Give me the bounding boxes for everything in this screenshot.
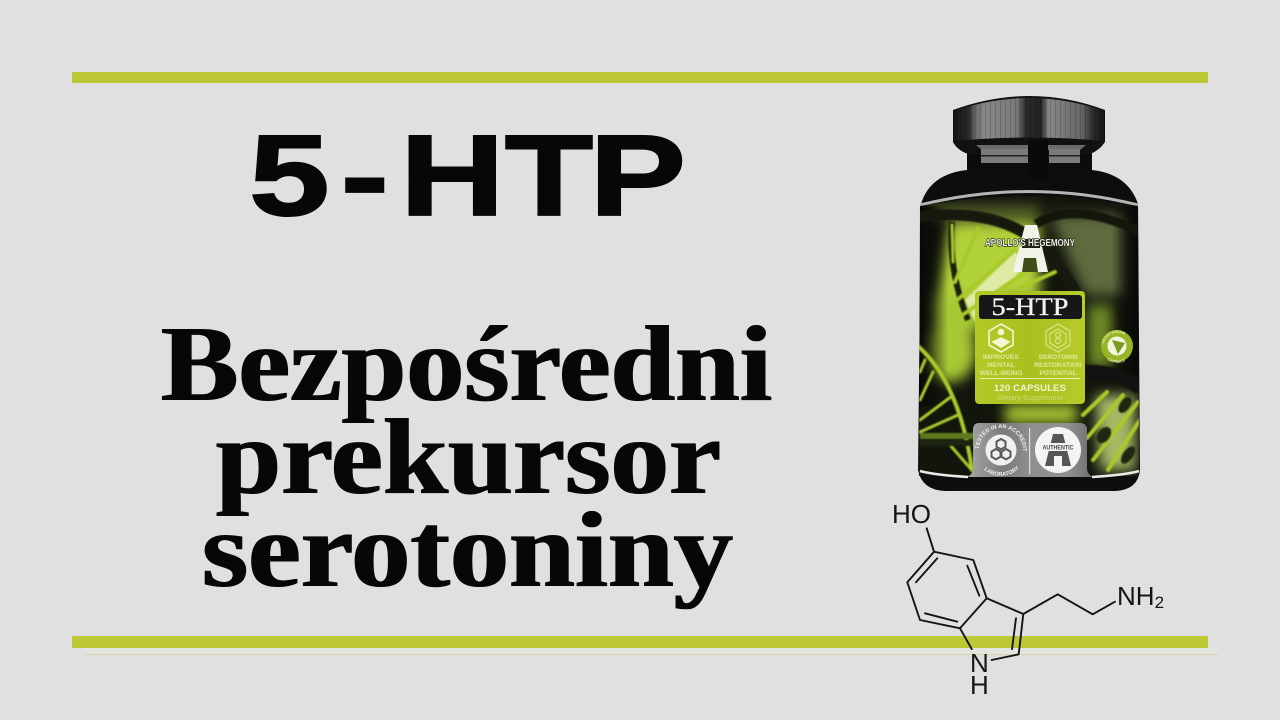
icon: mental well-being (989, 324, 1013, 352)
bright streak (965, 252, 1028, 322)
brand logo: Apollo's Hegemony (985, 225, 1075, 272)
title: 5-HTP: 5-HTP (249, 111, 686, 240)
molecule bonds (907, 528, 1115, 660)
benefit text right: RESTORATION (1034, 362, 1082, 369)
bottle body (918, 170, 1140, 491)
label edge shading (918, 206, 948, 406)
benefit text left (979, 354, 1023, 377)
vegetarian badge (1101, 330, 1133, 363)
top accent bar (72, 72, 1208, 83)
bottle label artwork (918, 186, 1140, 478)
benefit text right: SEROTONIN (1038, 354, 1078, 361)
dark helix strands (918, 215, 1078, 296)
molecule labels: 2 (1155, 593, 1164, 612)
bottom accent bar (72, 636, 1218, 655)
brand logo: Apollo's Hegemony: APOLLO'S HEGEMONY (985, 237, 1075, 249)
vegetarian badge: VEGETARIAN (1102, 330, 1126, 344)
subtitle: Bezpośredni prekursor serotoniny: Bezpośredni (161, 305, 772, 424)
authentic seal: AUTHENTIC (1042, 444, 1074, 452)
benefit text left: MENTAL (987, 362, 1015, 369)
subtitle: Bezpośredni prekursor serotoniny: serotoniny (202, 491, 733, 610)
infographic canvas (72, 72, 1218, 694)
benefit text right (1034, 354, 1082, 377)
tested laboratory seal: TESTED IN AN ACCREDITED (975, 424, 1027, 452)
molecule labels: H (970, 670, 989, 700)
vegetarian badge: CAPSULE (1108, 358, 1126, 363)
product name: 5-HTP (992, 294, 1068, 321)
molecule labels (892, 499, 1164, 700)
subtitle: Bezpośredni prekursor serotoniny: prekursor (216, 398, 721, 517)
molecule labels: N (970, 648, 989, 678)
serotonin molecule diagram (892, 499, 1164, 700)
capsule count: 120 CAPSULES (994, 383, 1066, 394)
benefit text right: POTENTIAL (1039, 370, 1077, 377)
tested laboratory seal: LABORATORY (984, 466, 1018, 476)
shoulder highlight (920, 192, 1138, 205)
authentic seal (1035, 427, 1081, 473)
silver badge strip (968, 423, 1092, 477)
bottle cap (953, 96, 1105, 178)
bottle base highlight (920, 471, 1139, 477)
supplement bottle (918, 96, 1140, 491)
icon: serotonin (1046, 324, 1070, 352)
molecule labels: NH (1117, 581, 1155, 611)
tested laboratory seal (975, 424, 1027, 476)
dietary supplement: Dietary Supplement (997, 393, 1064, 402)
green glows (924, 206, 1135, 470)
molecule labels: HO (892, 499, 931, 529)
benefit text left: WELL-BEING (979, 370, 1023, 377)
green product panel (975, 291, 1085, 404)
green helix rungs (919, 225, 1140, 470)
subtitle: Bezpośredni prekursor serotoniny (161, 305, 772, 610)
benefit text left: IMPROVES (983, 354, 1019, 361)
